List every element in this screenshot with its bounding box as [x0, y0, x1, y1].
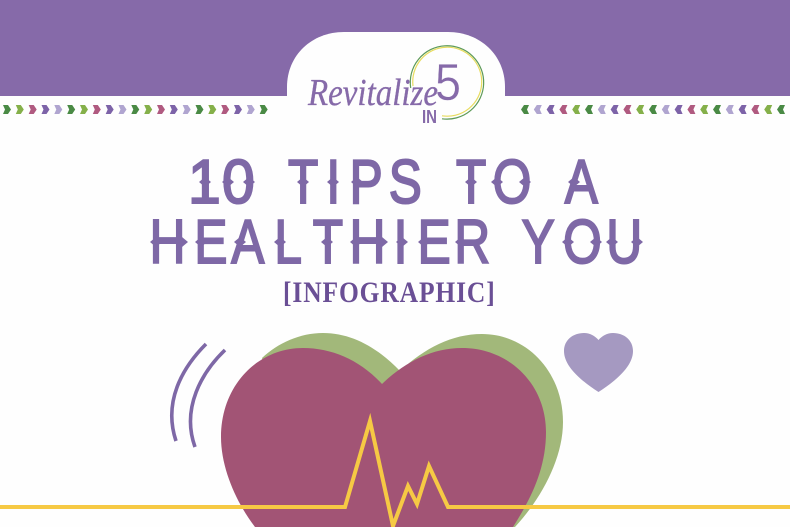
- heartbeat line: [0, 421, 790, 526]
- title: [150, 147, 643, 276]
- logo yellow ring: [413, 47, 482, 116]
- heart green shadow: [262, 333, 563, 527]
- logo: Revitalize in 5: [287, 32, 505, 140]
- title letter stem diamonds: [150, 177, 643, 247]
- left chevron row: [3, 105, 268, 114]
- logo wordmark: Revitalize: [307, 72, 438, 114]
- logo green ring: [410, 46, 484, 119]
- subtitle: [INFOGRAPHIC]: [283, 276, 495, 310]
- small lavender heart: [564, 333, 633, 392]
- heart rose front: [221, 348, 546, 527]
- purple header band: [0, 0, 790, 96]
- title number 10: 10: [188, 147, 255, 216]
- title line 1: TIPS TO A: [288, 147, 598, 216]
- logo word IN: IN: [422, 107, 437, 127]
- right chevron row: [521, 105, 785, 114]
- title line 2: HEALTHIER YOU: [150, 207, 642, 276]
- large heart: [221, 333, 563, 527]
- motion arcs: [172, 344, 225, 447]
- logo numeral 5: 5: [435, 54, 461, 112]
